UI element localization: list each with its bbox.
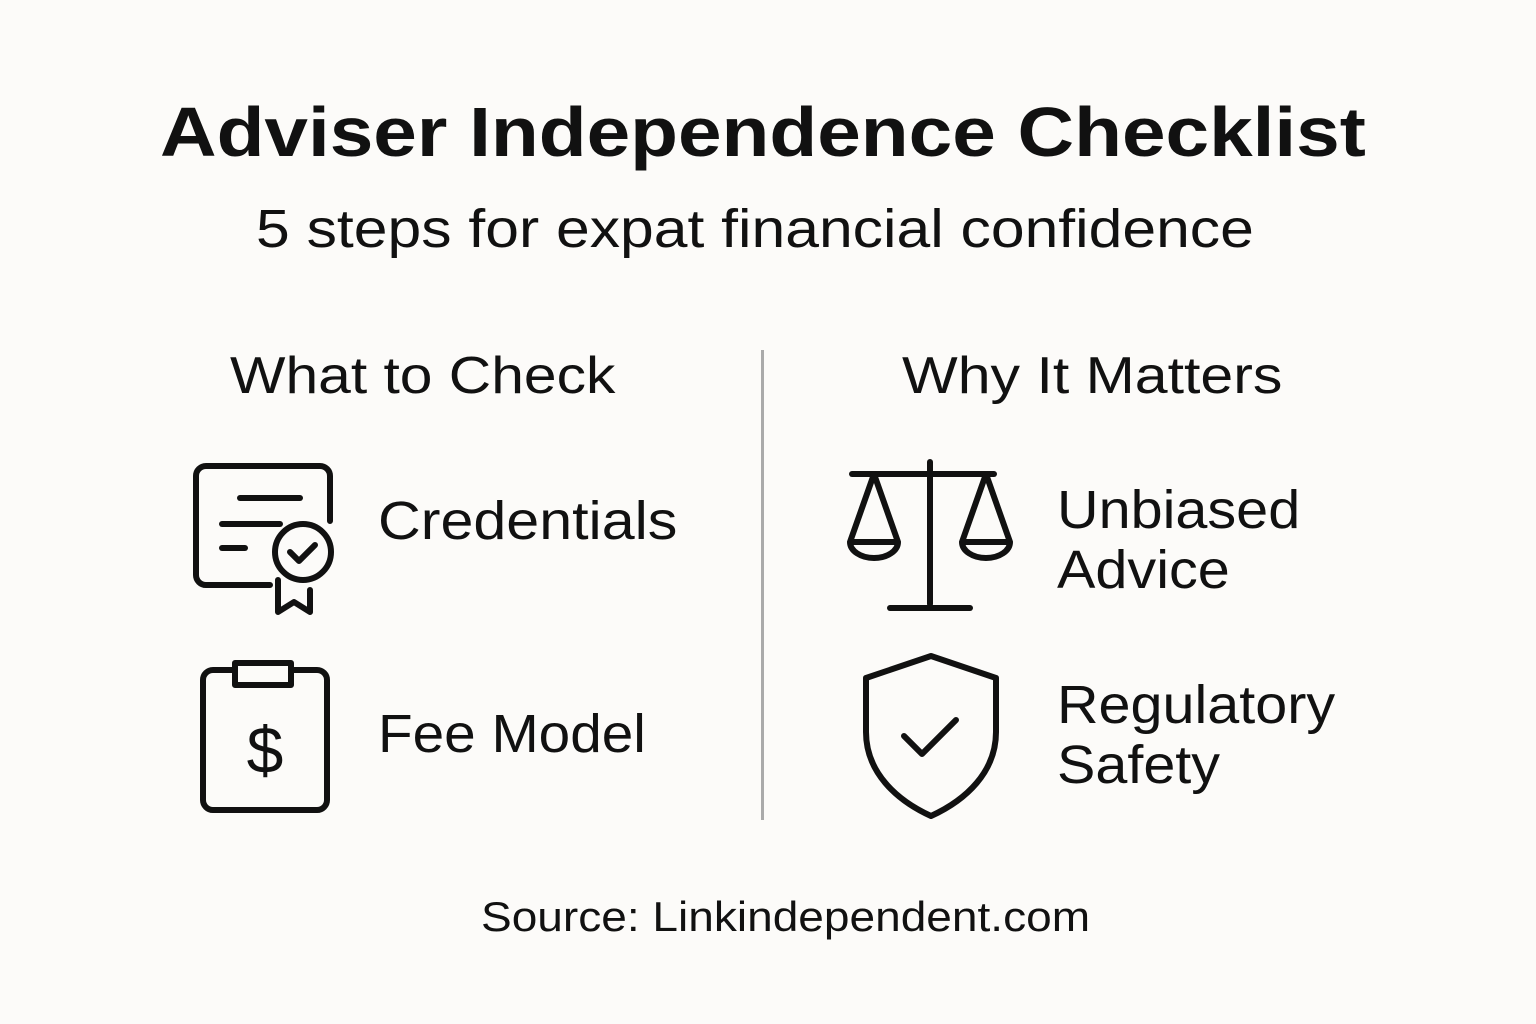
label: fee model: Fee Model [378,704,646,764]
label: credentials: Credentials [378,491,677,551]
label: unbiased advice: Advice [1057,540,1230,600]
label: regulatory safety [1057,675,1335,795]
heading: why it matters: Why It Matters [902,347,1282,405]
label: unbiased advice: Unbiased [1057,480,1300,540]
title: Adviser Independence Checklist [160,93,1366,171]
icon: scales [847,459,1013,611]
icon: clipboard dollar: $ [247,713,283,787]
label: regulatory safety: Safety [1057,735,1220,795]
label: unbiased advice [1057,480,1300,600]
subtitle: 5 steps for expat financial confidence [256,199,1254,259]
icon: certificate [193,463,334,615]
source: Source: Linkindependent.com [481,893,1090,940]
divider [761,350,764,820]
icon: clipboard dollar [200,660,330,813]
label: regulatory safety: Regulatory [1057,675,1335,735]
heading: what to check: What to Check [230,347,615,405]
icon: shield [863,653,999,819]
